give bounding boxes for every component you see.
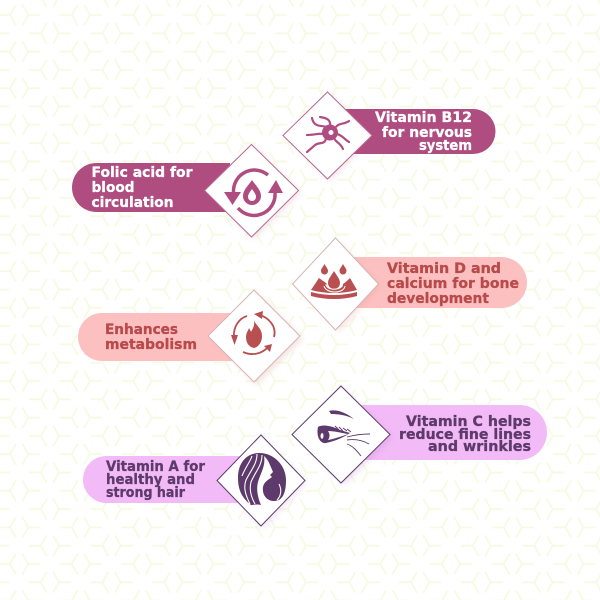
panel: vitamin B12 (283, 92, 496, 181)
text: vitamin A: Vitamin A for (106, 459, 205, 475)
text: folic acid: Folic acid for (92, 165, 193, 181)
text: folic acid: blood (92, 180, 134, 196)
pill: metabolism (78, 313, 235, 361)
pill: vitamin A (83, 456, 240, 503)
pill: vitamin D (340, 257, 527, 308)
icon: eye (317, 410, 370, 456)
icon: neuron (307, 117, 349, 152)
panel: vitamin C (292, 386, 547, 485)
icon: blood cycle (224, 170, 283, 215)
icon: flame cycle (231, 311, 275, 354)
text: vitamin D: development (387, 291, 489, 307)
panel: folic acid (72, 144, 301, 239)
text: vitamin A: healthy and (106, 472, 195, 488)
diamond: vitamin D (292, 238, 381, 332)
panel: vitamin D (292, 238, 527, 332)
pill: vitamin C (345, 405, 547, 460)
diamond: vitamin B12 (283, 92, 374, 181)
pill: vitamin B12 (330, 109, 496, 154)
text: vitamin A: strong hair (106, 485, 185, 501)
text: folic acid (92, 165, 193, 211)
text: vitamin C: Vitamin C helps (406, 414, 531, 430)
diamond: vitamin A (217, 435, 307, 529)
text: vitamin B12 (375, 110, 472, 154)
diamond: metabolism (208, 290, 303, 385)
text: folic acid: circulation (92, 195, 174, 211)
diamond: folic acid (204, 144, 301, 239)
text: vitamin B12: system (419, 138, 472, 154)
text: vitamin D (387, 261, 519, 307)
text: vitamin B12: for nervous (382, 125, 472, 141)
text: vitamin C: reduce fine lines (399, 427, 531, 443)
text: vitamin C: and wrinkles (428, 439, 531, 455)
icon: hair silhouette (238, 453, 286, 505)
panel: metabolism (78, 290, 303, 385)
text: vitamin D: calcium for bone (387, 276, 519, 292)
text: metabolism (105, 322, 197, 353)
text: metabolism: metabolism (105, 337, 197, 353)
text: vitamin B12: Vitamin B12 (375, 110, 472, 126)
text: vitamin D: Vitamin D and (387, 261, 501, 277)
text: vitamin C (399, 414, 531, 455)
text: metabolism: Enhances (105, 322, 178, 338)
diamond: vitamin C (292, 386, 392, 485)
pill: folic acid (72, 163, 230, 212)
text: vitamin A (106, 459, 205, 501)
icon: bone drops (311, 264, 357, 299)
panel: vitamin A (83, 435, 307, 529)
